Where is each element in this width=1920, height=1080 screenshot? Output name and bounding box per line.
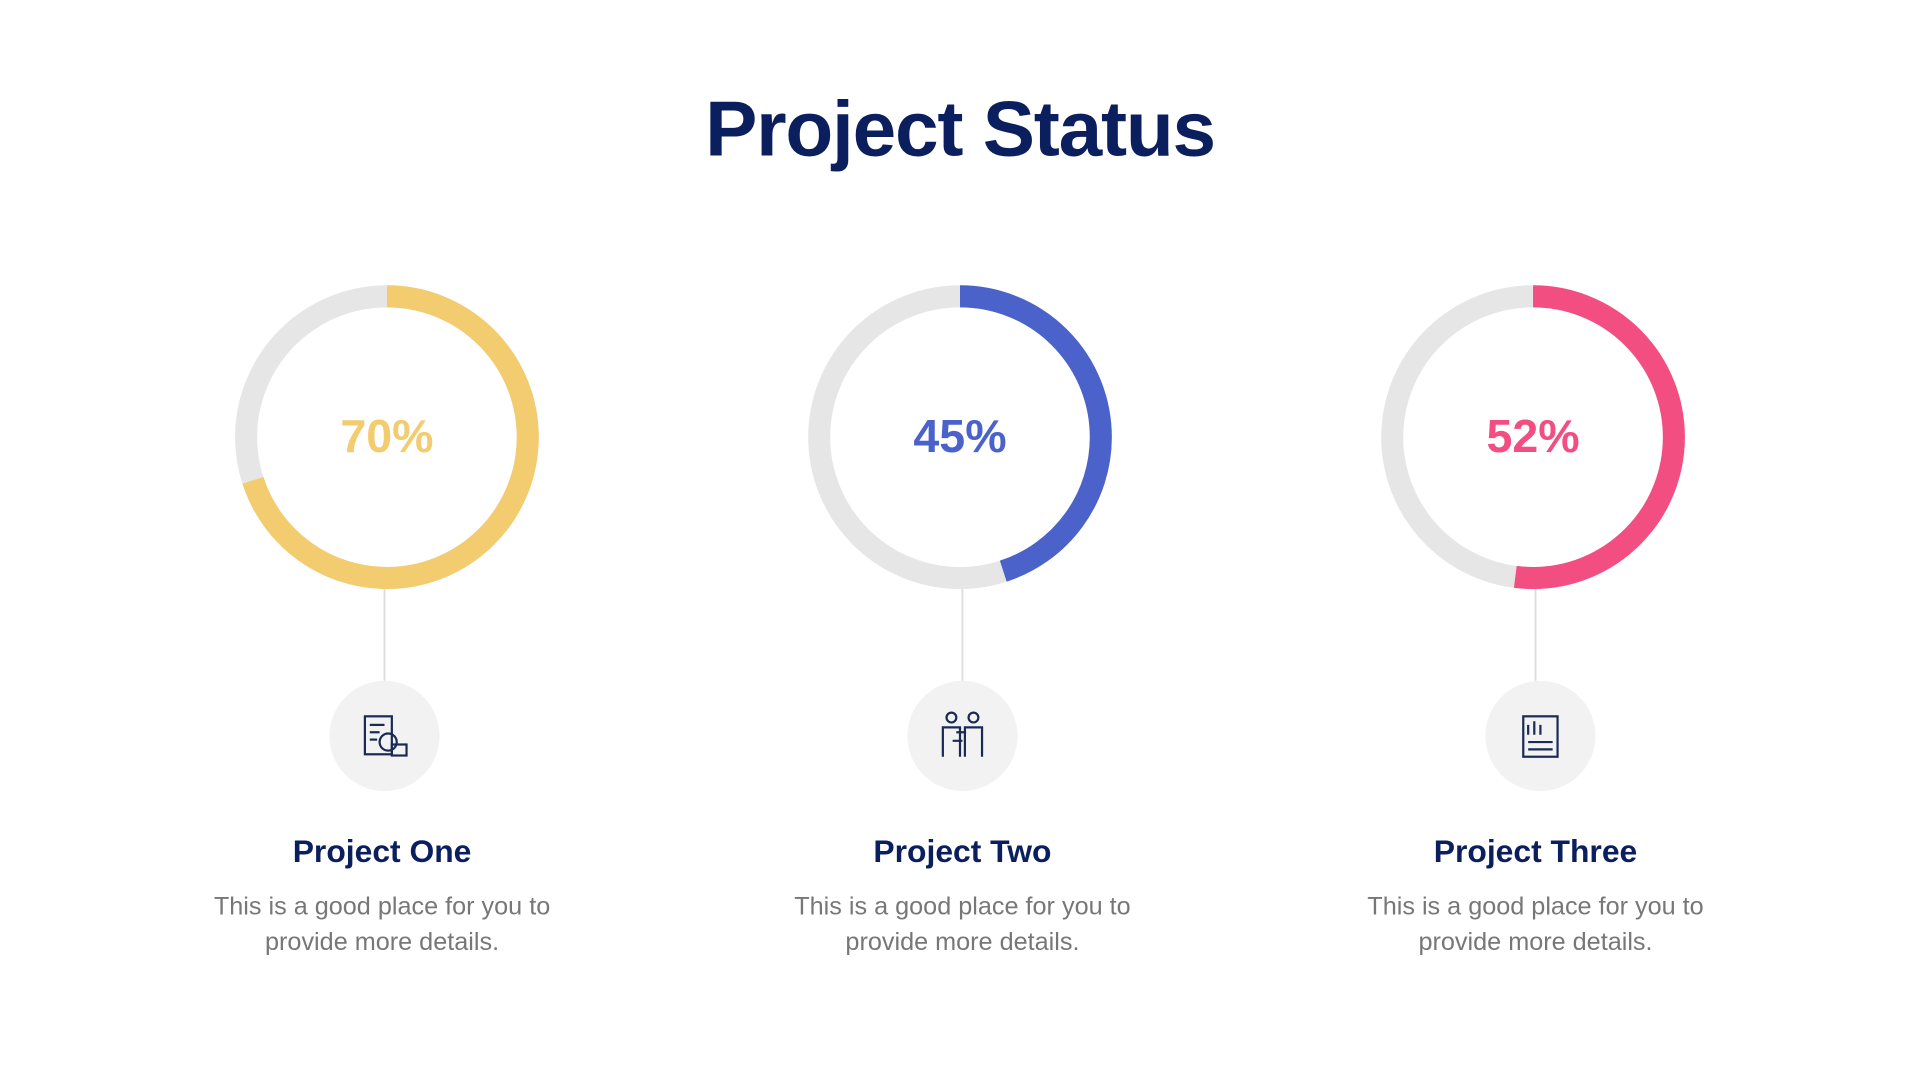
heading: Project Two	[873, 833, 1051, 869]
percentage: 70%	[340, 411, 434, 463]
heading: Project Three	[1434, 833, 1637, 869]
donut chart: 70%	[235, 285, 539, 791]
description: provide more details.	[845, 928, 1079, 956]
description: This is a good place for you to	[794, 893, 1131, 921]
description	[1367, 893, 1704, 956]
description: This is a good place for you to	[1367, 893, 1704, 921]
panel: project one	[214, 285, 550, 956]
description: provide more details.	[1418, 928, 1653, 956]
donut chart: 45%	[808, 285, 1112, 791]
description: provide more details.	[265, 928, 499, 956]
description	[214, 893, 550, 956]
percentage: 52%	[1486, 411, 1580, 463]
title: Project Status	[705, 84, 1215, 173]
panel: project three	[1367, 285, 1704, 956]
description	[794, 893, 1131, 956]
donut chart: 52%	[1381, 285, 1685, 791]
percentage: 45%	[913, 411, 1007, 463]
panel: project two	[794, 285, 1131, 956]
description: This is a good place for you to	[214, 893, 550, 921]
heading: Project One	[293, 833, 471, 869]
